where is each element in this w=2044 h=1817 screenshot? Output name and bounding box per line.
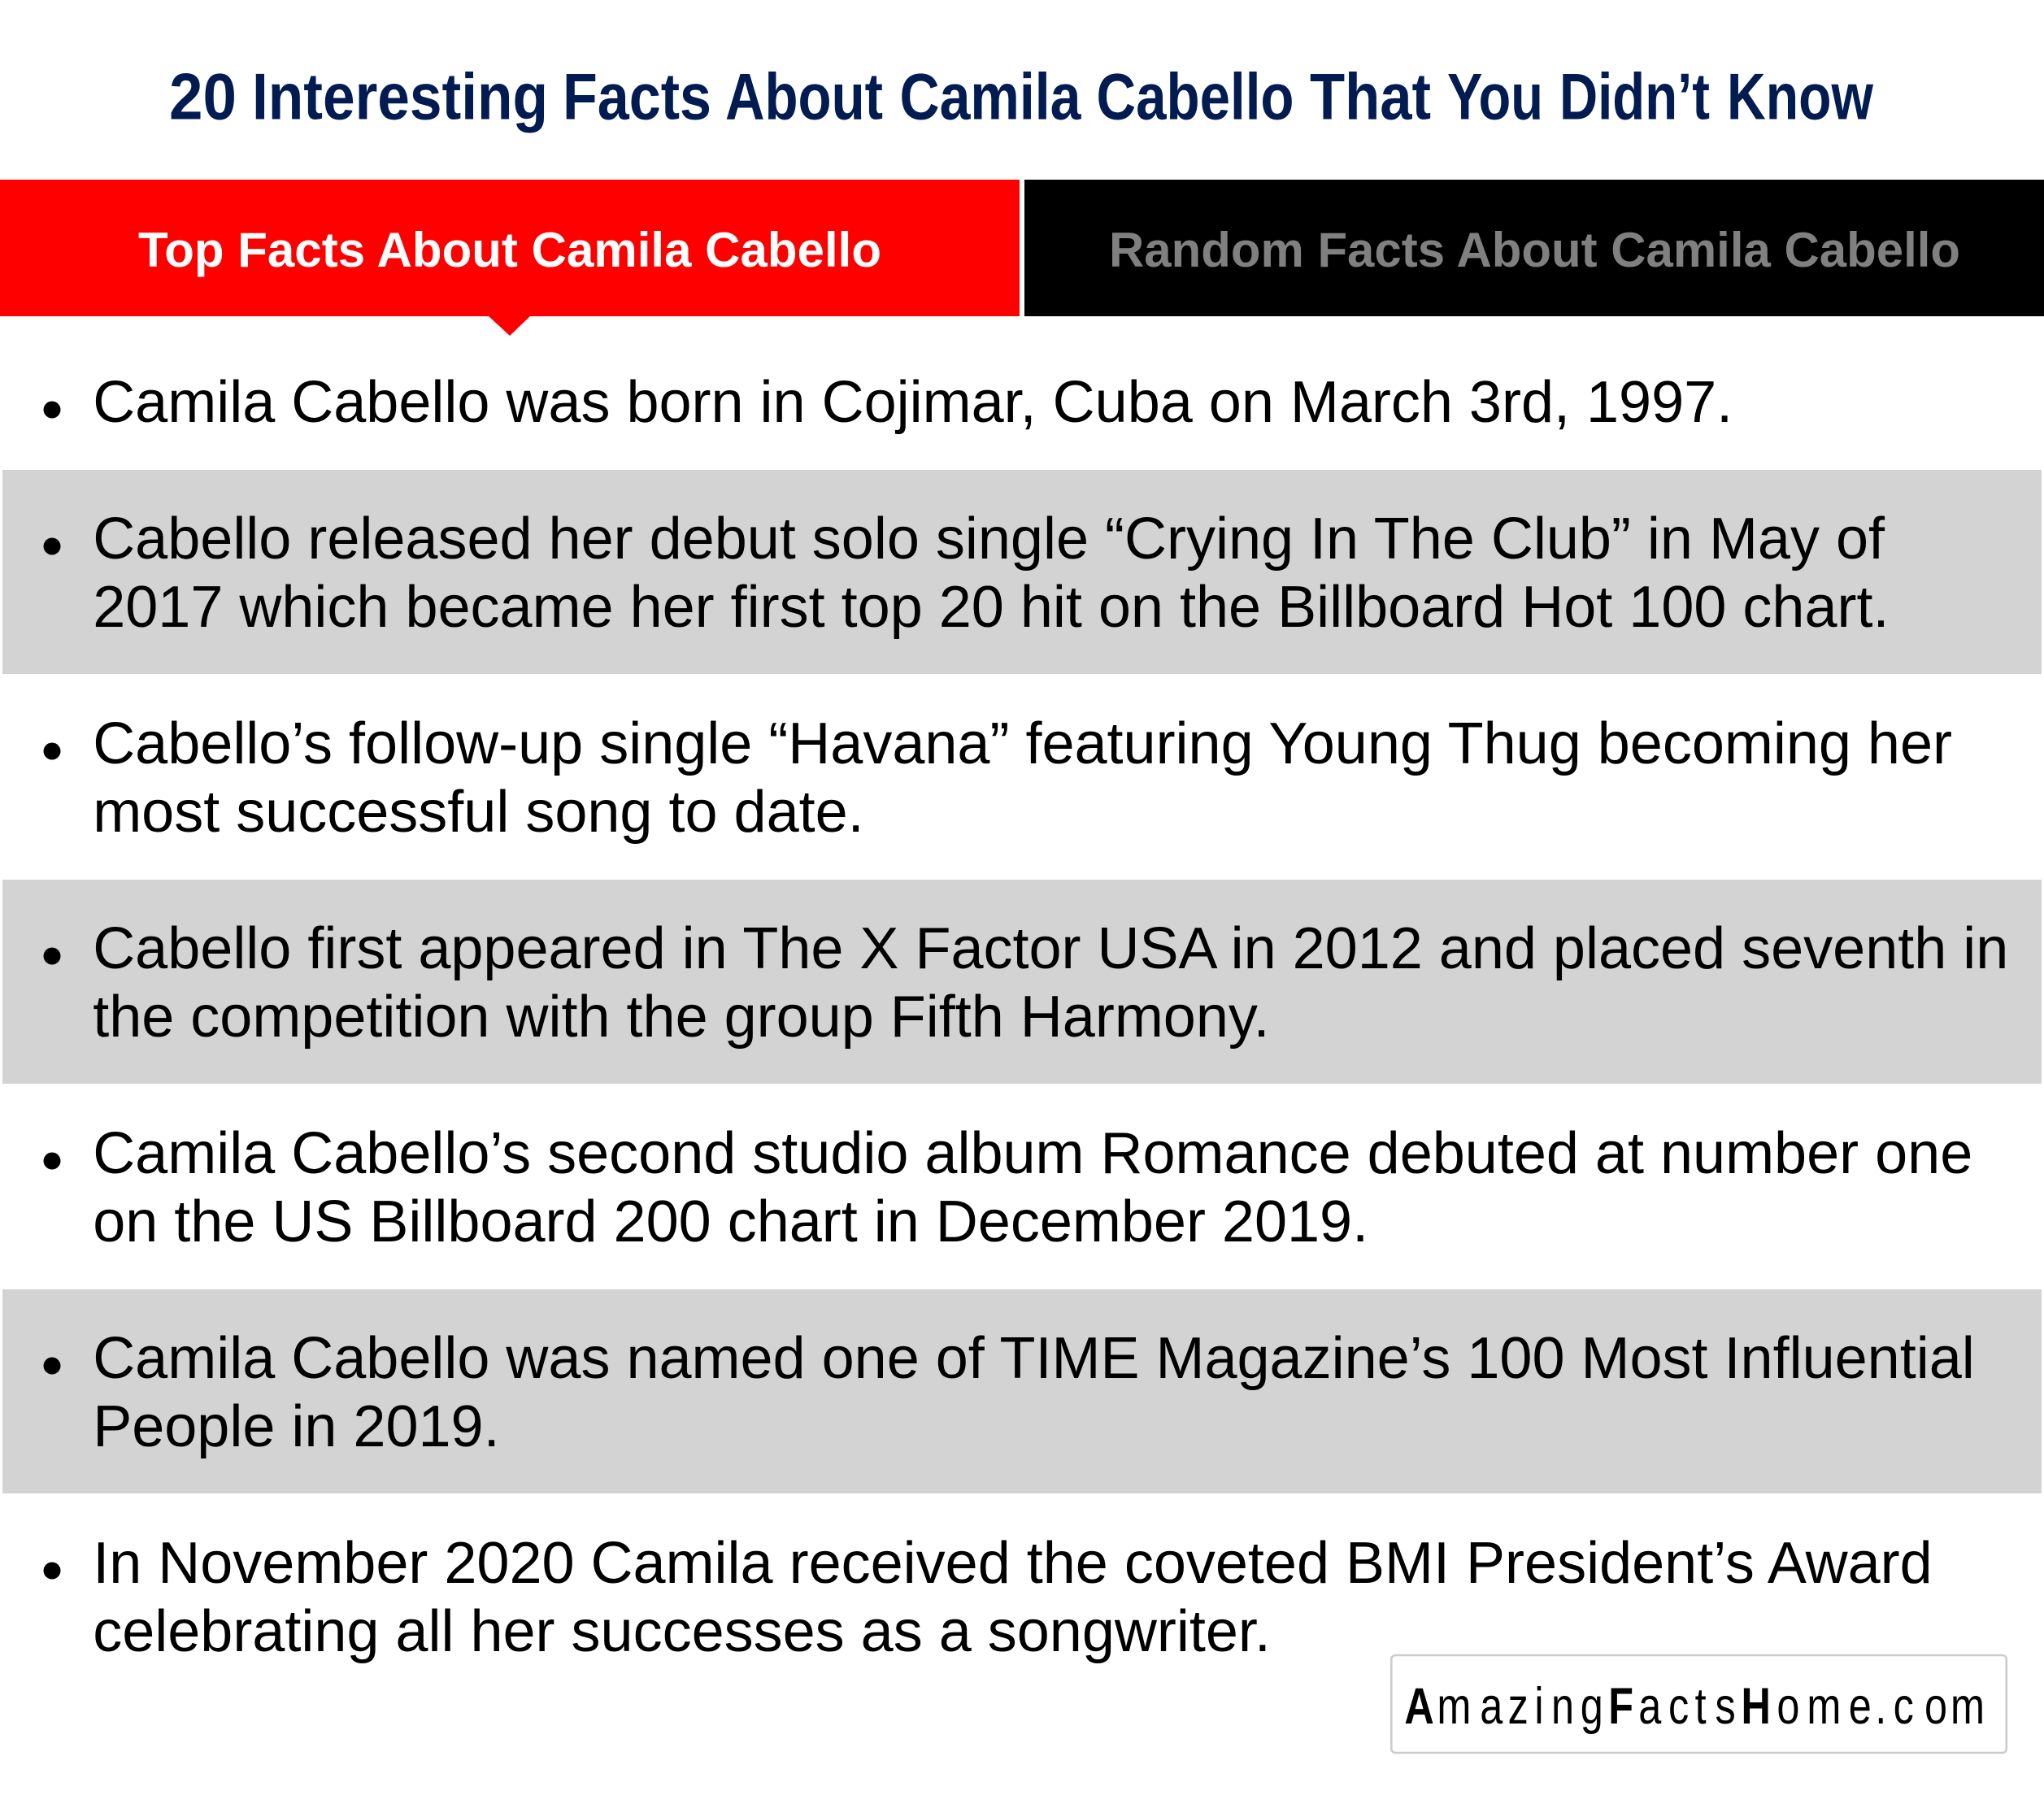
watermark: AmazingFactsHome.com: F	[1608, 1678, 1633, 1735]
title: Camila	[899, 60, 1081, 133]
fact 2: 2017 which became her first top 20 hit on the Billboard Hot 100 chart.	[93, 575, 1889, 640]
fact 4: Cabello first appeared in The X Factor USA in 2012 and placed seventh in	[93, 916, 2008, 981]
fact 3: most successful song to date.	[93, 780, 864, 845]
watermark: AmazingFactsHome.com: ome.com	[1777, 1678, 1985, 1735]
title: Know	[1727, 60, 1874, 133]
fact 6: People in 2019.	[93, 1394, 500, 1459]
watermark: AmazingFactsHome.com	[1391, 1655, 2007, 1753]
fact 2: Cabello released her debut solo single “Crying In The Club” in May of	[93, 506, 1885, 572]
fact 2	[2, 470, 2042, 674]
tab: top facts (active)	[0, 180, 1020, 336]
fact 5: Camila Cabello’s second studio album Romance debuted at number one	[93, 1121, 1972, 1186]
watermark: AmazingFactsHome.com: H	[1741, 1678, 1771, 1735]
watermark: AmazingFactsHome.com: mazing	[1437, 1678, 1603, 1735]
watermark: AmazingFactsHome.com: acts	[1638, 1678, 1736, 1735]
tab: top facts (active): Top Facts About Camila Cabello	[138, 223, 881, 277]
tab: random facts (inactive)	[1024, 180, 2044, 316]
title: Facts	[563, 60, 711, 133]
fact 6	[2, 1289, 2042, 1493]
title: 20	[169, 60, 237, 133]
watermark: AmazingFactsHome.com: A	[1404, 1678, 1434, 1735]
fact 4	[2, 880, 2042, 1084]
title: Interesting	[252, 60, 548, 133]
fact 3: Cabello’s follow-up single “Havana” featuring Young Thug becoming her	[93, 711, 1952, 776]
title: You	[1447, 60, 1543, 133]
fact 7: In November 2020 Camila received the coveted BMI President’s Award	[93, 1531, 1933, 1596]
fact 7: celebrating all her successes as a songwriter.	[93, 1599, 1271, 1664]
title: About	[725, 60, 883, 133]
title	[169, 60, 1874, 133]
title: Cabello	[1096, 60, 1294, 133]
tab: random facts (inactive): Random Facts About Camila Cabello	[1109, 223, 1960, 277]
fact 4: the competition with the group Fifth Harmony.	[93, 985, 1270, 1050]
fact 3	[44, 711, 1952, 845]
title: That	[1310, 60, 1431, 133]
title: Didn’t	[1559, 60, 1710, 133]
fact 7	[44, 1531, 1933, 1664]
fact 6: Camila Cabello was named one of TIME Magazine’s 100 Most Influential	[93, 1326, 1975, 1391]
fact 5	[44, 1121, 1972, 1254]
fact 5: on the US Billboard 200 chart in December 2019.	[93, 1189, 1368, 1254]
fact 1: Camila Cabello was born in Cojimar, Cuba on March 3rd, 1997.	[93, 370, 1733, 435]
